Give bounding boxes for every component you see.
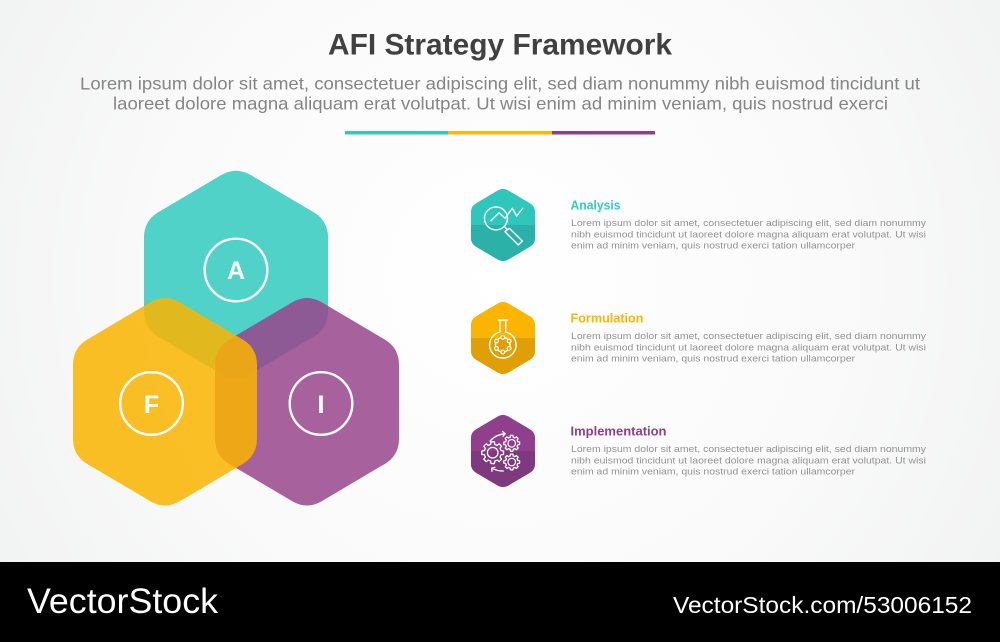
hexagon I [215,298,399,505]
subtitle text [80,73,920,113]
icon: analysis magnifier [471,189,535,261]
title: AFI Strategy Framework [328,28,672,62]
footer url: VectorStock.com/53006152 [673,592,972,618]
hexagon F: F [144,391,159,419]
icon: implementation gears [471,415,535,487]
hexagon A [144,171,328,378]
heading: formulation: Formulation [570,311,644,325]
body text: analysis: Lorem ipsum dolor sit amet, consectetuer adipiscing elit, sed diam nonummy [571,218,926,229]
body text: analysis: enim ad minim veniam, quis nostrud exerci tation ullamcorper [571,240,855,251]
hexagon venn diagram [73,171,399,505]
body text: analysis: nibh euismod tincidunt ut laoreet dolore magna aliquam erat volutpat. Ut wisi [571,229,926,240]
body text: formulation: Lorem ipsum dolor sit amet, consectetuer adipiscing elit, sed diam nonummy [571,331,926,342]
icon: formulation flask [471,302,535,374]
footer bar [0,562,1000,642]
body text: formulation: enim ad minim veniam, quis nostrud exerci tation ullamcorper [571,353,855,364]
body text: analysis [571,218,926,251]
body text: implementation: enim ad minim veniam, quis nostrud exerci tation ullamcorper [571,466,855,477]
footer brand: VectorStock [27,582,219,621]
subtitle text: Lorem ipsum dolor sit amet, consectetuer adipiscing elit, sed diam nonummy nibh euismod tincidunt ut [80,73,920,93]
subtitle text: laoreet dolore magna aliquam erat volutpat. Ut wisi enim ad minim veniam, quis nostrud exerci [113,93,888,113]
item: analysis [471,189,926,261]
body text: implementation: Lorem ipsum dolor sit amet, consectetuer adipiscing elit, sed diam nonummy [571,444,926,455]
item: implementation [471,415,926,487]
body text: formulation: nibh euismod tincidunt ut laoreet dolore magna aliquam erat volutpat. Ut wisi [571,342,926,353]
hexagon F [73,298,257,505]
heading: implementation: Implementation [570,424,666,438]
tricolour divider [345,131,655,134]
heading: analysis: Analysis [570,198,621,212]
body text: formulation [571,331,926,364]
body text: implementation [571,444,926,477]
item: formulation [471,302,926,374]
hexagon I: I [318,391,324,419]
hexagon A: A [227,257,245,285]
body text: implementation: nibh euismod tincidunt ut laoreet dolore magna aliquam erat volutpat. Ut wisi [571,455,926,466]
